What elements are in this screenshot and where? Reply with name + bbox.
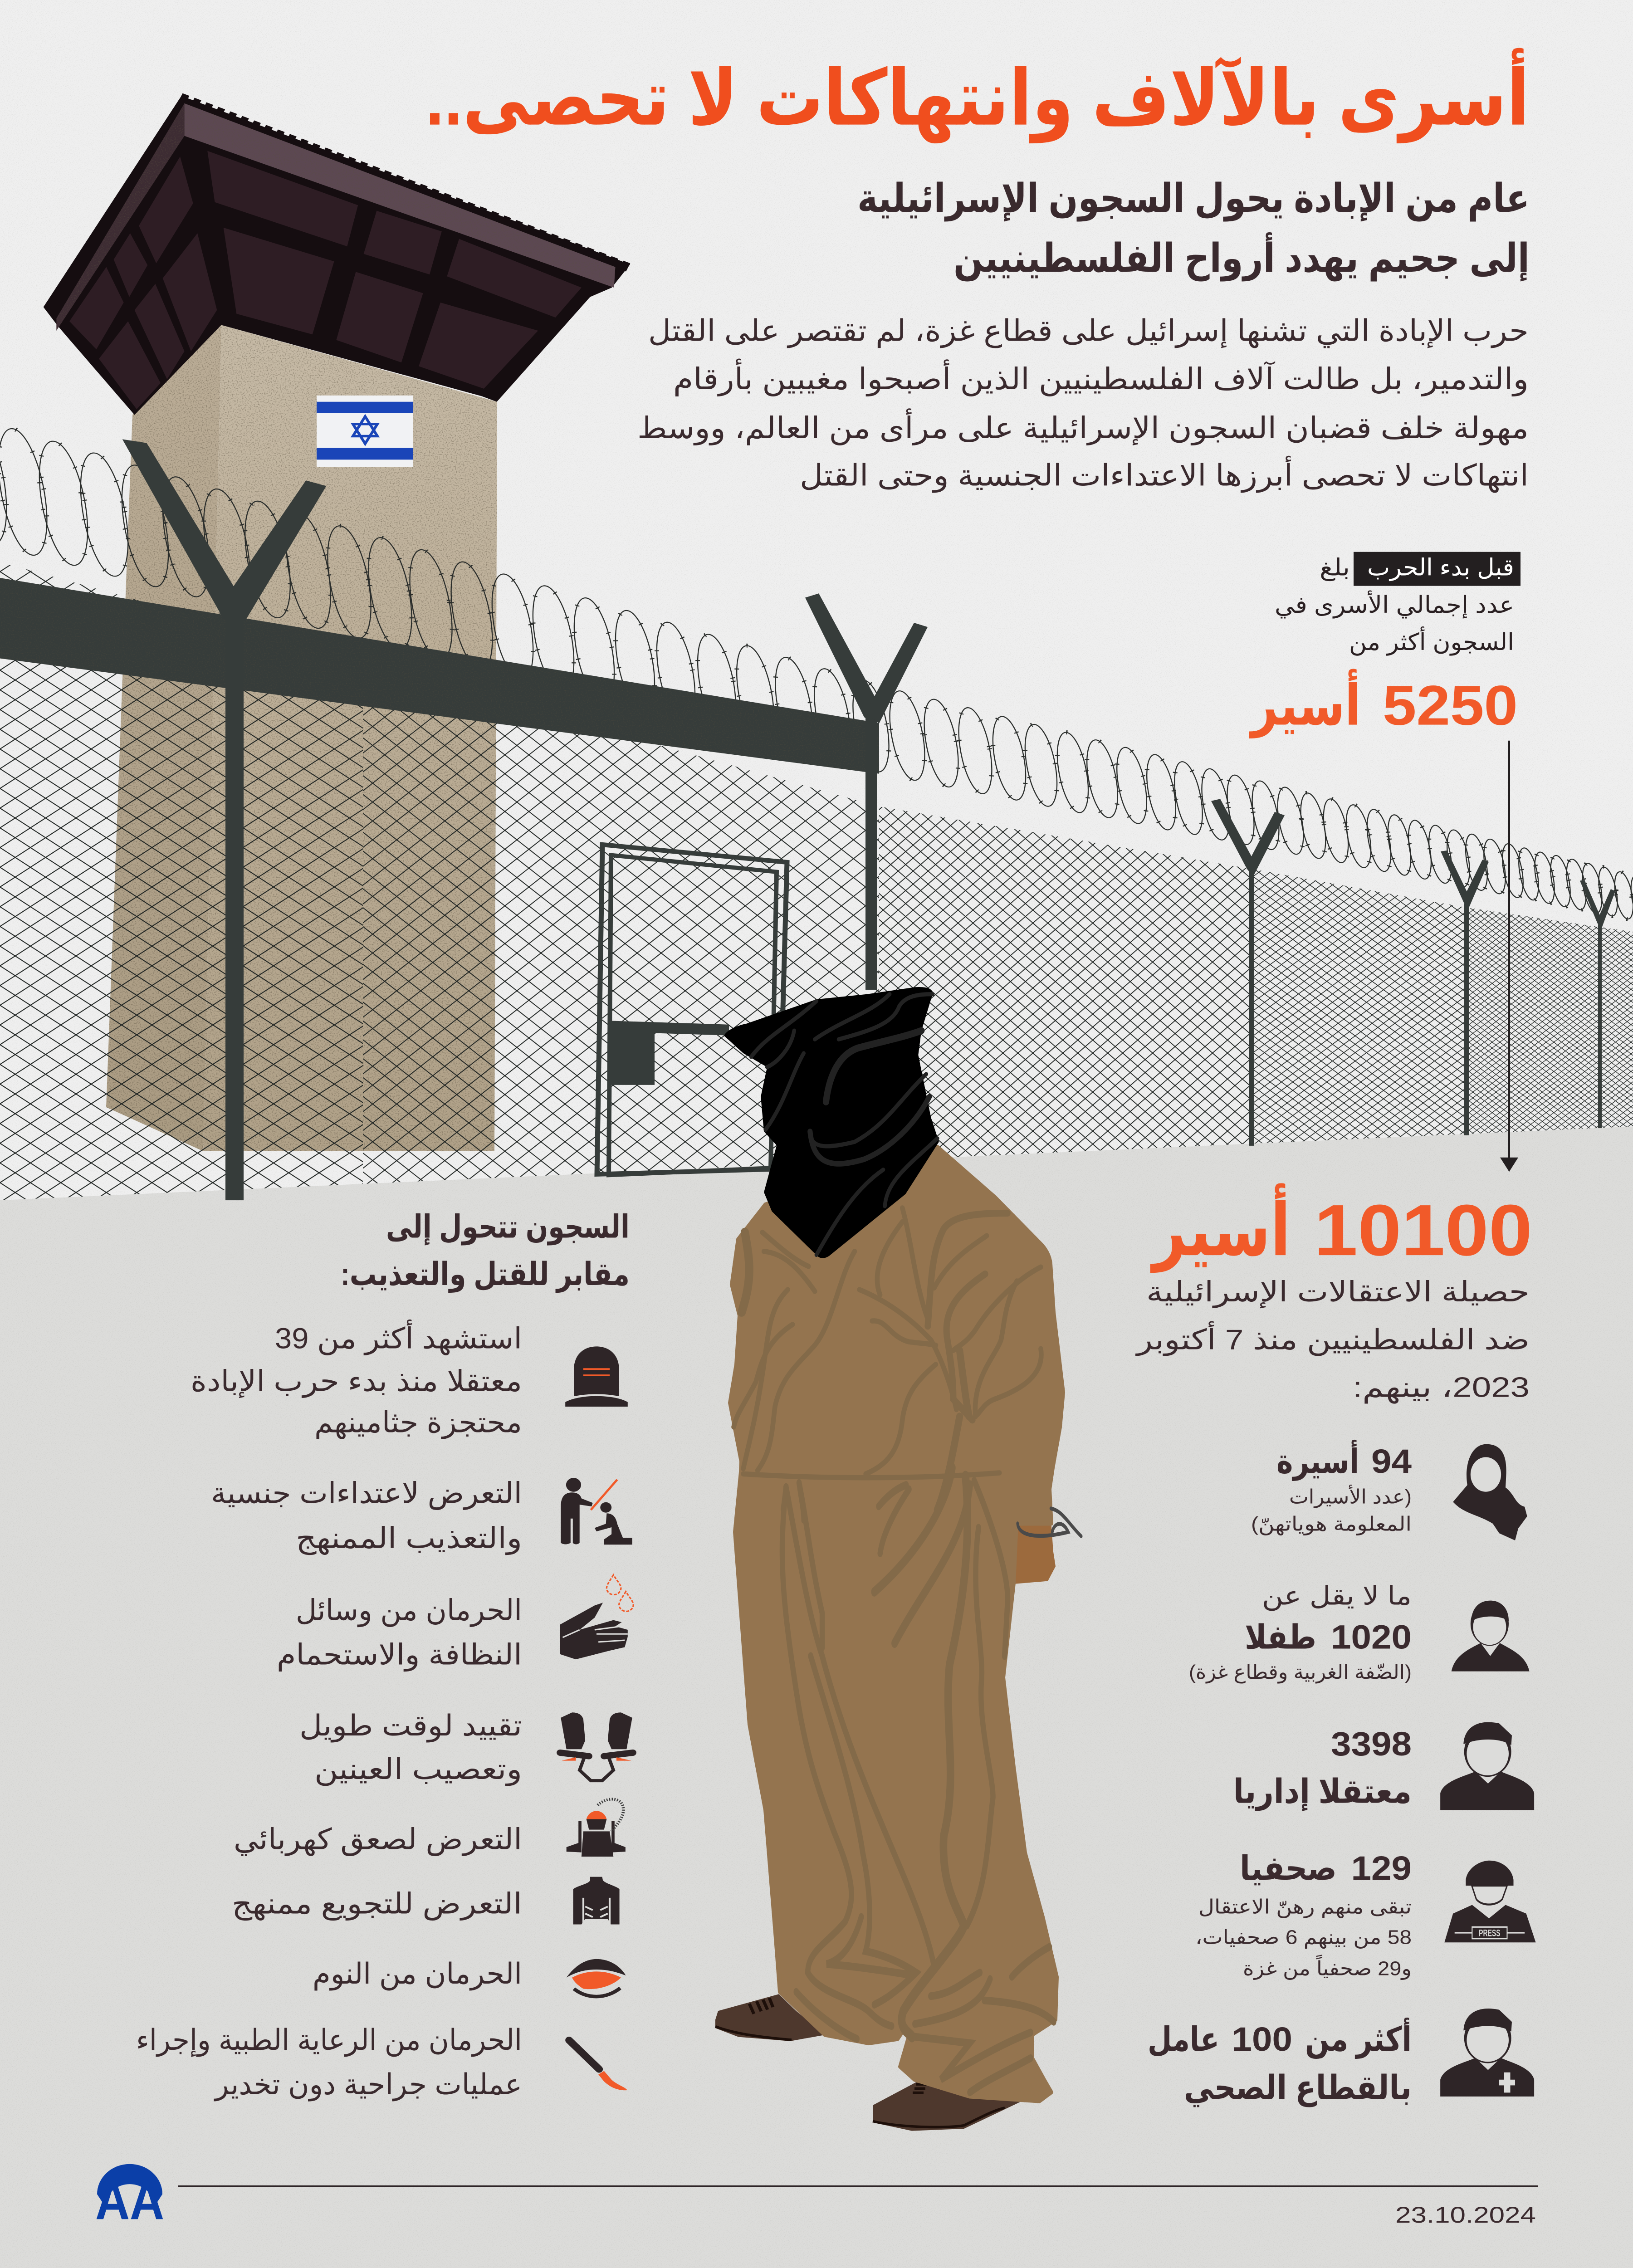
stat: children: (الضّفة الغربية وقطاع غزة) (1189, 1661, 1412, 1684)
callout: before the war (1275, 552, 1521, 656)
item: sexual assault and torture: والتعذيب الممنهج (296, 1522, 522, 1555)
Anadolu Agency logo: AA (95, 2170, 164, 2231)
fence beam (0, 578, 879, 774)
item: medical care deprivation: الحرمان من الرعاية الطبية وإجراء (136, 2024, 522, 2058)
callout: before the war: قبل بدء الحرب (1367, 554, 1514, 581)
tower roof (44, 96, 630, 415)
fence post: by the gate (805, 593, 928, 990)
prisoner figure (715, 987, 1081, 2131)
heading: prisons turn into graves (341, 1209, 630, 1293)
tower body (106, 325, 497, 1151)
icon: emaciated torso (573, 1877, 620, 1925)
stat: health workers: 100 (1232, 2021, 1292, 2058)
arrests description: حصيلة الاعتقالات الإسرائيلية (1146, 1276, 1530, 1308)
stat: journalists (1195, 1850, 1412, 1980)
item: sexual assault and torture: التعرض لاعتداءات جنسية (211, 1477, 522, 1510)
stat: journalists: و29 صحفياً من غزة (1243, 1955, 1412, 1980)
item: electric shock: التعرض لصعق كهربائي (234, 1823, 522, 1857)
item: sexual assault and torture (211, 1477, 522, 1555)
item: shackling and blindfolding: وتعصيب العينين (314, 1753, 522, 1786)
stat: children (1189, 1581, 1412, 1684)
shoes (715, 1994, 1022, 2131)
stat: health workers: أكثر من (1305, 2017, 1412, 2059)
item: medical care deprivation (136, 2024, 522, 2102)
item: shackling and blindfolding (299, 1710, 522, 1786)
footer rule (178, 2185, 1538, 2187)
arrow from 5250 to 10100 (1500, 741, 1518, 1172)
icon: gravestone (565, 1346, 628, 1407)
stat: women prisoners: أسيرة (1276, 1439, 1359, 1481)
heading: prisons turn into graves: السجون تتحول إلى (386, 1209, 630, 1246)
item: hygiene deprivation: النظافة والاستحمام (277, 1639, 522, 1672)
fence post 4 (1441, 850, 1489, 1135)
stat: health workers: بالقطاع الصحي (1184, 2069, 1412, 2107)
black hood (724, 987, 939, 1258)
stat: 10100 prisoners: 10100 (1314, 1190, 1532, 1271)
item: deaths: معتقلا منذ بدء حرب الإبادة (191, 1365, 522, 1398)
stat: journalists: 129 (1351, 1850, 1412, 1887)
callout: before the war: السجون أكثر من (1349, 626, 1514, 656)
intro paragraph: انتهاكات لا تحصى أبرزها الاعتداءات الجنسية وحتى القتل (800, 455, 1529, 493)
intro paragraph (637, 314, 1529, 493)
item: deaths: محتجزة جثامينهم (314, 1407, 522, 1439)
stat: journalists: صحفيا (1240, 1850, 1337, 1887)
heading: prisons turn into graves: مقابر للقتل والتعذيب: (341, 1256, 630, 1293)
icon: man (1440, 1722, 1534, 1810)
stat: children: ما لا يقل عن (1262, 1581, 1412, 1611)
stat: 5250 prisoners: 5250 (1383, 674, 1518, 737)
fence post 5 (1580, 880, 1615, 1128)
item: deaths (191, 1319, 522, 1439)
stat: health workers: عامل (1148, 2021, 1219, 2058)
icon: beating (561, 1478, 632, 1545)
icon: journalist with helmet and press vest (1444, 1861, 1536, 1942)
date: 23.10.2024 (1395, 2203, 1536, 2228)
stat: administrative detainees (1233, 1725, 1412, 1812)
icon: shackled hands (560, 1712, 633, 1781)
icon: electric chair (567, 1799, 626, 1857)
jumpsuit (730, 1147, 1063, 2101)
jumpsuit folds: legs (782, 1468, 1054, 2092)
intro paragraph: حرب الإبادة التي تشنها إسرائيل على قطاع غزة، لم تقتصر على القتل (648, 314, 1529, 348)
stat: administrative detainees: معتقلا إداريا (1233, 1773, 1412, 1812)
fence gate (597, 845, 787, 1175)
stat: children: طفلا (1245, 1618, 1316, 1656)
chain-link fence mesh (0, 562, 1633, 1200)
intro paragraph: مهولة خلف قضبان السجون الإسرائيلية على مرأى من العالم، ووسط (637, 408, 1529, 445)
callout: before the war: بلغ (1320, 554, 1350, 581)
item: sleep deprivation: الحرمان من النوم (313, 1958, 522, 1991)
icon: medic (1440, 2009, 1534, 2097)
stat: women prisoners: المعلومة هوياتهنّ) (1251, 1513, 1412, 1536)
arrests description: 2023، بينهم: (1353, 1372, 1530, 1404)
stat: women prisoners: 94 (1371, 1443, 1412, 1480)
icon: tired eye (567, 1959, 626, 1997)
icon: hands and water drops (560, 1575, 633, 1659)
item: hygiene deprivation (277, 1594, 522, 1672)
fence post: front left (122, 439, 326, 1200)
stat: health workers (1148, 2017, 1412, 2107)
stat: children: 1020 (1331, 1618, 1412, 1656)
arrests description: ضد الفلسطينيين منذ 7 أكتوبر (1135, 1321, 1530, 1356)
intro paragraph: والتدمير، بل طالت آلاف الفلسطينيين الذين أصبحوا مغيبين بأرقام (673, 358, 1529, 396)
hand (1013, 1520, 1056, 1584)
stat: journalists: 58 من بينهم 6 صحفيات، (1195, 1926, 1412, 1949)
jumpsuit folds: torso (733, 1208, 1041, 1521)
background: prison yard ground (0, 1126, 1633, 2268)
icon: child (1452, 1601, 1530, 1672)
item: deaths: استشهد أكثر من 39 (275, 1319, 522, 1356)
flag of Israel on tower (317, 396, 413, 467)
stat: 10100 prisoners (1150, 1183, 1532, 1273)
razor wire coils (0, 413, 1633, 923)
item: starvation: التعرض للتجويع ممنهج (232, 1888, 522, 1921)
item: shackling and blindfolding: تقييد لوقت طويل (299, 1710, 522, 1742)
stat: 5250 prisoners (1249, 669, 1518, 738)
subtitle (857, 176, 1530, 282)
icon: woman with hijab (1453, 1444, 1527, 1540)
arrests description (1135, 1276, 1530, 1404)
stat: journalists: تبقى منهم رهنّ الاعتقال (1198, 1896, 1412, 1918)
stat: administrative detainees: 3398 (1331, 1725, 1412, 1763)
icon: journalist with helmet and press vest: PRESS (1479, 1928, 1501, 1938)
item: medical care deprivation: عمليات جراحية دون تخدير (214, 2069, 522, 2102)
item: hygiene deprivation: الحرمان من وسائل (296, 1594, 522, 1628)
watchtower (44, 96, 630, 1151)
stat: women prisoners (1251, 1439, 1412, 1536)
icon: scalpel (569, 2040, 627, 2090)
fence post 3 (1211, 799, 1285, 1146)
wrist restraint wire (1017, 1509, 1081, 1536)
stat: women prisoners: (عدد الأسيرات (1289, 1484, 1412, 1509)
stat: 10100 prisoners: أسير (1150, 1183, 1291, 1273)
callout: before the war: عدد إجمالي الأسرى في (1275, 590, 1514, 618)
stat: 5250 prisoners: أسير (1249, 669, 1361, 738)
